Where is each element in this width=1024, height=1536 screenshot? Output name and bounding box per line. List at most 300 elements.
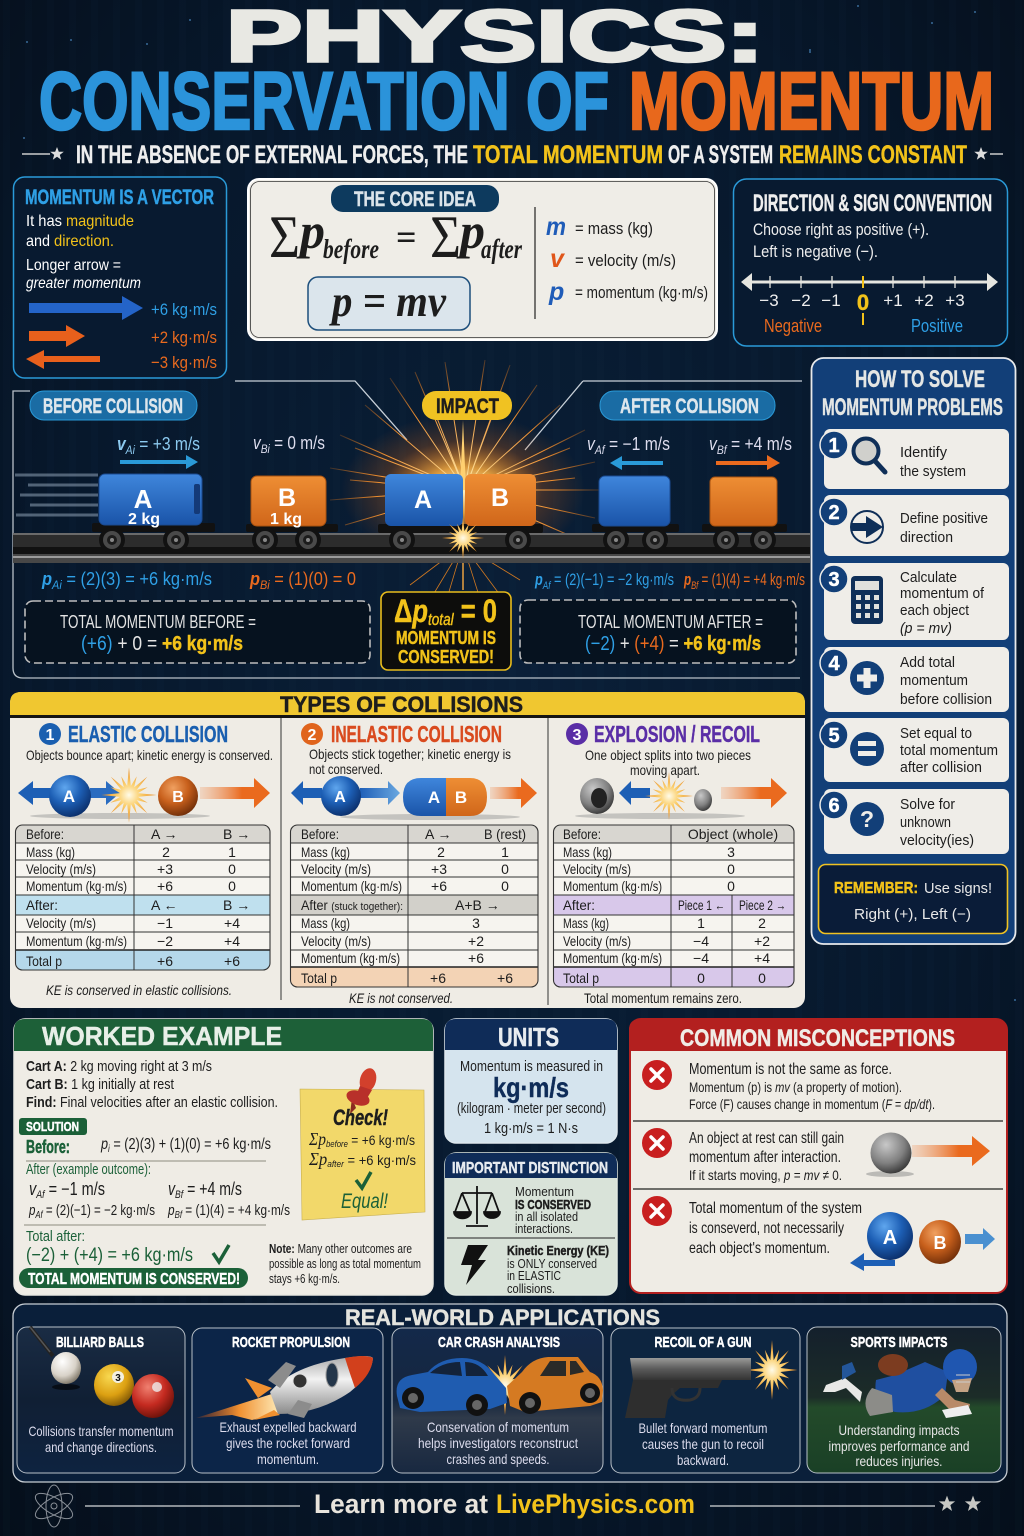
table: B → xyxy=(223,897,250,913)
card: recoil of a gun: causes the gun to recoil xyxy=(642,1436,764,1452)
carts at impact: B xyxy=(491,484,509,512)
misconception 2: An object at rest can still gain xyxy=(689,1130,844,1147)
table: Momentum (kg·m/s) xyxy=(563,878,662,894)
table: 0 xyxy=(501,861,509,877)
table: 1 xyxy=(501,844,509,860)
misconception 1: Force (F) causes change in momentum (F = dp/dt). xyxy=(689,1096,935,1112)
table: −4 xyxy=(693,950,709,966)
heading: TYPES OF COLLISIONS xyxy=(280,692,523,717)
heading xyxy=(822,366,1003,421)
solution steps: After (example outcome): xyxy=(26,1161,151,1178)
legend: = velocity (m/s) xyxy=(575,251,676,270)
card: billiard balls: BILLIARD BALLS xyxy=(56,1334,144,1351)
card: billiard balls xyxy=(17,1327,185,1473)
card: car crash analysis: helps investigators reconstruct xyxy=(418,1435,578,1451)
body: kg·m/s xyxy=(493,1072,569,1103)
velocity labels: Af xyxy=(594,443,606,457)
table: A+B → xyxy=(455,897,500,913)
column heading xyxy=(301,721,502,747)
table: Total p xyxy=(26,953,62,969)
number line: Negative xyxy=(764,316,822,336)
legend xyxy=(546,213,708,306)
table: 0 xyxy=(697,970,705,986)
description: not conserved. xyxy=(309,761,383,777)
table xyxy=(16,825,270,970)
remember callout xyxy=(818,864,1008,934)
sticky note: Σp xyxy=(308,1129,326,1149)
conservation box: Δp xyxy=(394,593,432,629)
velocity labels: = −1 m/s xyxy=(605,434,670,454)
momentum text: in all isolated xyxy=(515,1209,578,1224)
solution steps xyxy=(24,1136,290,1266)
illustration: A xyxy=(63,787,75,806)
momentum equations xyxy=(41,569,805,592)
title xyxy=(39,0,994,147)
cart B before: 1 kg xyxy=(270,511,302,528)
panel: units xyxy=(445,1019,617,1143)
table: Velocity (m/s) xyxy=(563,933,631,949)
step 5: total momentum xyxy=(900,742,998,759)
table: Total p xyxy=(563,970,599,986)
card: rocket propulsion: momentum. xyxy=(257,1451,319,1467)
momentum equations: Ai xyxy=(51,578,62,592)
arrow: +6 xyxy=(29,296,217,320)
table: Velocity (m/s) xyxy=(563,861,631,877)
description: and xyxy=(26,233,50,250)
legend: = mass (kg) xyxy=(575,219,653,238)
icon: crashing cars xyxy=(397,1355,603,1416)
step 4 xyxy=(820,647,1009,712)
table: Mass (kg) xyxy=(301,844,350,860)
total after box xyxy=(520,600,796,663)
step 1: 1 xyxy=(828,435,840,457)
total after box: (−2) + (+4) = +6 kg·m/s xyxy=(585,633,761,655)
description: Objects bounce apart; kinetic energy is conserved. xyxy=(26,747,273,763)
velocity arrows xyxy=(120,455,780,470)
card: car crash analysis: Conservation of momentum xyxy=(427,1419,569,1435)
panel: direction and sign convention xyxy=(734,179,1008,346)
cart A before: A xyxy=(134,484,153,514)
card: sports impacts xyxy=(807,1327,1001,1473)
column: inelastic collision xyxy=(290,721,538,1006)
step 6: velocity(ies) xyxy=(900,832,974,849)
table: A → xyxy=(151,826,177,842)
pill: impact xyxy=(422,391,512,420)
sticky note: before xyxy=(326,1139,348,1149)
table: B → xyxy=(223,826,250,842)
cart B after xyxy=(702,477,787,553)
sticky note: Check! xyxy=(333,1105,388,1130)
number line xyxy=(741,273,998,336)
step 3 xyxy=(820,563,1009,640)
cart B before xyxy=(246,476,338,553)
solution steps: = (2)(−1) = −2 kg·m/s xyxy=(43,1202,155,1219)
step 6 xyxy=(820,789,1009,854)
sticky note: = +6 kg·m/s xyxy=(348,1132,415,1148)
total before box: (+6) + 0 = +6 kg·m/s xyxy=(81,633,243,655)
kinetic energy text: Kinetic Energy (KE) xyxy=(507,1243,609,1258)
card: car crash analysis: crashes and speeds. xyxy=(446,1451,550,1467)
sticky note: after xyxy=(327,1159,345,1169)
sticky note: = +6 kg·m/s xyxy=(344,1152,416,1168)
formula: sum before equals sum after: p xyxy=(456,203,485,259)
heading: COMMON MISCONCEPTIONS xyxy=(680,1025,955,1052)
arrow: -3: −3 kg·m/s xyxy=(151,353,217,372)
formula: sum before equals sum after: = xyxy=(396,217,417,257)
card: billiard balls: Collisions transfer momentum xyxy=(28,1423,174,1439)
body xyxy=(457,1058,606,1137)
solution steps: = (1)(4) = +4 kg·m/s xyxy=(182,1202,290,1219)
table: Mass (kg) xyxy=(563,844,612,860)
velocity labels: = 0 m/s xyxy=(270,433,325,453)
table: Velocity (m/s) xyxy=(26,861,96,877)
track xyxy=(13,533,810,563)
column heading: 1 xyxy=(46,727,55,744)
table: +6 xyxy=(430,970,446,986)
table: Velocity (m/s) xyxy=(26,915,96,931)
step 2: direction xyxy=(900,529,953,546)
legend: m xyxy=(546,213,566,241)
momentum equations: Af xyxy=(542,580,551,592)
description: Longer arrow = xyxy=(26,257,121,274)
arrow: +2 xyxy=(29,325,217,347)
momentum text xyxy=(515,1184,591,1236)
step 6: unknown xyxy=(900,814,951,831)
formula: sum before equals sum after: after xyxy=(481,234,522,264)
icon: billiard balls: 3 xyxy=(115,1373,121,1384)
card: sports impacts: Understanding impacts xyxy=(838,1422,960,1438)
heading: UNITS xyxy=(498,1022,559,1052)
number line: −3 xyxy=(759,291,779,310)
kinetic energy text: in ELASTIC xyxy=(507,1268,561,1283)
step 3: (p = mv) xyxy=(900,621,952,637)
table: Before: xyxy=(26,826,64,842)
misconception 3: each object's momentum. xyxy=(689,1240,830,1257)
table: 0 xyxy=(228,878,236,894)
conservation box: = 0 xyxy=(454,593,497,629)
step 3: Calculate xyxy=(900,570,957,586)
description: greater momentum xyxy=(26,275,141,292)
conclusion pill: TOTAL MOMENTUM IS CONSERVED! xyxy=(28,1271,240,1288)
misconception 3: A xyxy=(883,1227,897,1249)
card: sports impacts: SPORTS IMPACTS xyxy=(850,1334,948,1351)
momentum equations: = (1)(4) = +4 kg·m/s xyxy=(698,570,805,589)
description: It has xyxy=(26,213,62,230)
description: One object splits into two pieces xyxy=(585,747,751,763)
table: 2 xyxy=(162,844,170,860)
step 3: 3 xyxy=(828,569,840,591)
table: Mass (kg) xyxy=(563,915,609,931)
icon: balance scale xyxy=(454,1186,500,1226)
heading: MOMENTUM IS A VECTOR xyxy=(25,186,214,209)
step 2 xyxy=(820,495,1009,556)
table: A → xyxy=(425,826,451,842)
momentum equations: Bi xyxy=(260,578,270,592)
legend: p xyxy=(548,278,564,306)
table: +3 xyxy=(157,861,173,877)
number line: −2 xyxy=(791,291,811,310)
table: Velocity (m/s) xyxy=(301,933,371,949)
column: explosion recoil xyxy=(554,721,794,1006)
pill heading: THE CORE IDEA xyxy=(354,188,476,211)
column heading: EXPLOSION / RECOIL xyxy=(594,721,760,747)
heading: WORKED EXAMPLE xyxy=(42,1021,282,1051)
table: −2 xyxy=(157,933,173,949)
misconception 3: is conseverd, not necessarily xyxy=(689,1220,844,1237)
arrow: -3 xyxy=(26,350,217,372)
velocity labels xyxy=(117,433,792,457)
problem statement: Cart B: 1 kg initially at rest xyxy=(26,1076,175,1093)
step 1 xyxy=(820,429,1009,489)
table: +6 xyxy=(431,878,447,894)
step 5: 5 xyxy=(828,725,840,747)
step 1: the system xyxy=(900,463,966,480)
icon: pistol xyxy=(625,1340,798,1418)
total before box: TOTAL MOMENTUM BEFORE = xyxy=(60,612,256,632)
card: rocket propulsion: Exhaust expelled backward xyxy=(220,1419,356,1435)
card: rocket propulsion: gives the rocket forward xyxy=(226,1435,350,1451)
table: Piece 1 ← xyxy=(678,897,725,913)
solution steps: (−2) + (+4) = +6 kg·m/s xyxy=(26,1245,193,1266)
footer text xyxy=(314,1489,695,1519)
description xyxy=(26,213,141,292)
table: −1 xyxy=(157,915,173,931)
description xyxy=(585,747,751,778)
velocity labels: v xyxy=(117,434,127,454)
momentum text: interactions. xyxy=(515,1221,573,1236)
table: Momentum (kg·m/s) xyxy=(26,933,127,949)
panel: types of collisions xyxy=(10,692,805,1008)
solution steps: p xyxy=(167,1202,175,1219)
table: After: xyxy=(26,897,58,913)
table: Mass (kg) xyxy=(301,915,350,931)
step 2: 2 xyxy=(828,502,840,524)
step 4: Add total xyxy=(900,654,955,671)
legend: v xyxy=(550,245,566,273)
conservation box: CONSERVED! xyxy=(398,647,494,667)
table: +3 xyxy=(431,861,447,877)
momentum equations: = (2)(3) = +6 kg·m/s xyxy=(62,569,212,589)
column heading: 3 xyxy=(573,727,582,744)
number line: +2 xyxy=(914,291,934,310)
table: +6 xyxy=(157,953,173,969)
table: 1 xyxy=(228,844,236,860)
formula: sum before equals sum after: before xyxy=(323,234,379,264)
table: 3 xyxy=(472,915,480,931)
table: Total p xyxy=(301,970,337,986)
column heading: INELASTIC COLLISION xyxy=(331,721,502,747)
table: Momentum (kg·m/s) xyxy=(563,950,662,966)
momentum text: IS CONSERVED xyxy=(515,1197,591,1212)
solution steps: Bf xyxy=(175,1210,183,1221)
formula: sum before equals sum after: Σ xyxy=(269,204,300,270)
table: +6 xyxy=(497,970,513,986)
velocity labels: Ai xyxy=(125,443,135,457)
table: 3 xyxy=(727,844,735,860)
illustration xyxy=(575,772,787,820)
table: +4 xyxy=(754,950,770,966)
pill: after collision xyxy=(600,391,775,420)
velocity labels: v xyxy=(709,434,718,454)
misconception 3: B xyxy=(934,1233,946,1253)
number line: −1 xyxy=(821,291,841,310)
illustration: B xyxy=(172,789,184,806)
panel: the core idea xyxy=(248,179,717,340)
icon: lightning bolt xyxy=(461,1245,488,1285)
subtitle: OF A SYSTEM xyxy=(668,141,773,169)
body: Momentum is measured in xyxy=(460,1058,603,1075)
icon: billiard balls xyxy=(30,1327,174,1418)
table: B (rest) xyxy=(484,826,526,842)
kinetic energy text: collisions. xyxy=(507,1281,555,1296)
table: 0 xyxy=(758,970,766,986)
card: car crash analysis: CAR CRASH ANALYSIS xyxy=(438,1334,560,1351)
step 4: 4 xyxy=(828,653,840,675)
heading: IMPORTANT DISTINCTION xyxy=(452,1160,608,1177)
table: 0 xyxy=(228,861,236,877)
solution steps: Before: xyxy=(26,1137,70,1157)
body: 1 kg·m/s = 1 N·s xyxy=(484,1120,578,1137)
problem statement xyxy=(26,1058,278,1111)
pill: before collision xyxy=(30,391,197,420)
footer text: Learn more at xyxy=(314,1489,488,1519)
icon: football player xyxy=(823,1349,977,1418)
icon: atom xyxy=(32,1485,76,1527)
footnote: KE is not conserved. xyxy=(349,990,453,1006)
remember callout: Right (+), Left (−) xyxy=(854,906,971,923)
description: moving apart. xyxy=(630,762,700,778)
pill: impact: IMPACT xyxy=(436,395,499,418)
title line: conservation of: CONSERVATION OF xyxy=(39,56,609,147)
description: Choose right as positive (+). xyxy=(753,220,929,239)
illustration xyxy=(18,767,270,823)
carts at impact xyxy=(378,474,543,559)
velocity labels: v xyxy=(253,433,262,453)
number line: +3 xyxy=(945,291,965,310)
arrow: +2: +2 kg·m/s xyxy=(151,328,217,347)
column heading: ELASTIC COLLISION xyxy=(68,721,228,747)
subtitle xyxy=(22,141,1003,169)
cart B before: B xyxy=(278,484,296,512)
step 3: each object xyxy=(900,603,969,619)
table: 0 xyxy=(727,878,735,894)
table: +6 xyxy=(224,953,240,969)
table: 0 xyxy=(501,878,509,894)
arrow: +6: +6 kg·m/s xyxy=(151,300,217,319)
table: +6 xyxy=(468,950,484,966)
card: rocket propulsion: ROCKET PROPULSION xyxy=(232,1334,350,1351)
solution steps: = −1 m/s xyxy=(45,1179,105,1199)
cart A before: 2 kg xyxy=(128,511,160,528)
number line: +1 xyxy=(883,291,903,310)
card: recoil of a gun xyxy=(611,1328,800,1473)
table: Object (whole) xyxy=(688,826,778,842)
footer text: LivePhysics.com xyxy=(496,1489,695,1519)
momentum equations: = (2)(−1) = −2 kg·m/s xyxy=(551,570,674,589)
sticky note: Σp xyxy=(308,1149,327,1169)
card: billiard balls: and change directions. xyxy=(45,1439,157,1455)
note xyxy=(269,1241,421,1286)
problem statement: Find: Final velocities after an elastic collision. xyxy=(26,1094,278,1111)
card: sports impacts: reduces injuries. xyxy=(856,1453,942,1469)
conservation box xyxy=(381,592,511,670)
step 5: Set equal to xyxy=(900,725,972,742)
solution steps: v xyxy=(29,1179,37,1199)
icon: pushpin xyxy=(344,1066,379,1114)
solution steps: = (2)(3) + (1)(0) = +6 kg·m/s xyxy=(110,1136,271,1153)
stars xyxy=(939,1496,981,1511)
misconception 2: If it starts moving, p = mv ≠ 0. xyxy=(689,1167,842,1183)
description: magnitude xyxy=(66,213,134,230)
momentum equations: p xyxy=(534,570,543,589)
panel: collision diagram xyxy=(13,360,810,678)
illustration: A xyxy=(428,788,440,807)
table xyxy=(554,825,794,987)
velocity labels: Bi xyxy=(261,442,270,456)
step 3: momentum of xyxy=(900,586,985,602)
card: recoil of a gun: RECOIL OF A GUN xyxy=(654,1334,752,1351)
table: A ← xyxy=(151,897,177,913)
solution steps: Af xyxy=(35,1189,45,1201)
carts at impact: A xyxy=(414,486,432,514)
note: possible as long as total momentum xyxy=(269,1256,421,1271)
step 2: Define positive xyxy=(900,510,988,527)
table: 1 xyxy=(697,915,705,931)
illustration xyxy=(291,776,537,820)
formula: sum before equals sum after: p xyxy=(296,203,325,259)
solution pill: SOLUTION xyxy=(26,1119,79,1134)
solution steps: Bf xyxy=(175,1189,184,1201)
panel: common misconceptions xyxy=(629,1019,1007,1293)
illustration: B xyxy=(455,788,467,807)
column: elastic collision xyxy=(16,721,273,998)
solution steps: p xyxy=(100,1136,108,1153)
velocity labels: Bf xyxy=(717,443,728,457)
cart A before xyxy=(92,474,215,553)
total before box xyxy=(25,601,370,663)
number line: Positive xyxy=(911,316,963,336)
subtitle: TOTAL MOMENTUM xyxy=(473,141,663,169)
misconception 3 xyxy=(642,1196,995,1271)
velocity labels: v xyxy=(587,434,596,454)
table: Momentum (kg·m/s) xyxy=(301,950,400,966)
table: 0 xyxy=(727,861,735,877)
impact burst xyxy=(330,360,605,605)
conservation box: total xyxy=(428,610,455,629)
speed streaks xyxy=(15,475,98,515)
pill: after collision: AFTER COLLISION xyxy=(620,395,759,418)
table: Momentum (kg·m/s) xyxy=(26,878,127,894)
table: +2 xyxy=(754,933,770,949)
formula: sum before equals sum after xyxy=(269,203,522,270)
table: +6 xyxy=(157,878,173,894)
table: Before: xyxy=(301,826,339,842)
body: (kilogram · meter per second) xyxy=(457,1100,606,1117)
conclusion pill xyxy=(19,1268,248,1288)
table: Momentum (kg·m/s) xyxy=(301,878,402,894)
table: After (stuck together): xyxy=(301,897,403,913)
misconception 1: Momentum (p) is mv (a property of motion). xyxy=(689,1079,902,1095)
legend: = momentum (kg·m/s) xyxy=(575,283,708,302)
momentum equations: = (1)(0) = 0 xyxy=(270,569,356,589)
misconception 2 xyxy=(642,1128,990,1183)
description: Objects stick together; kinetic energy is xyxy=(309,746,511,762)
panel: important distinction xyxy=(445,1153,617,1296)
description: Left is negative (−). xyxy=(753,242,878,261)
table: −4 xyxy=(693,933,709,949)
number line: 0 xyxy=(857,290,869,315)
step 4: before collision xyxy=(900,691,992,708)
